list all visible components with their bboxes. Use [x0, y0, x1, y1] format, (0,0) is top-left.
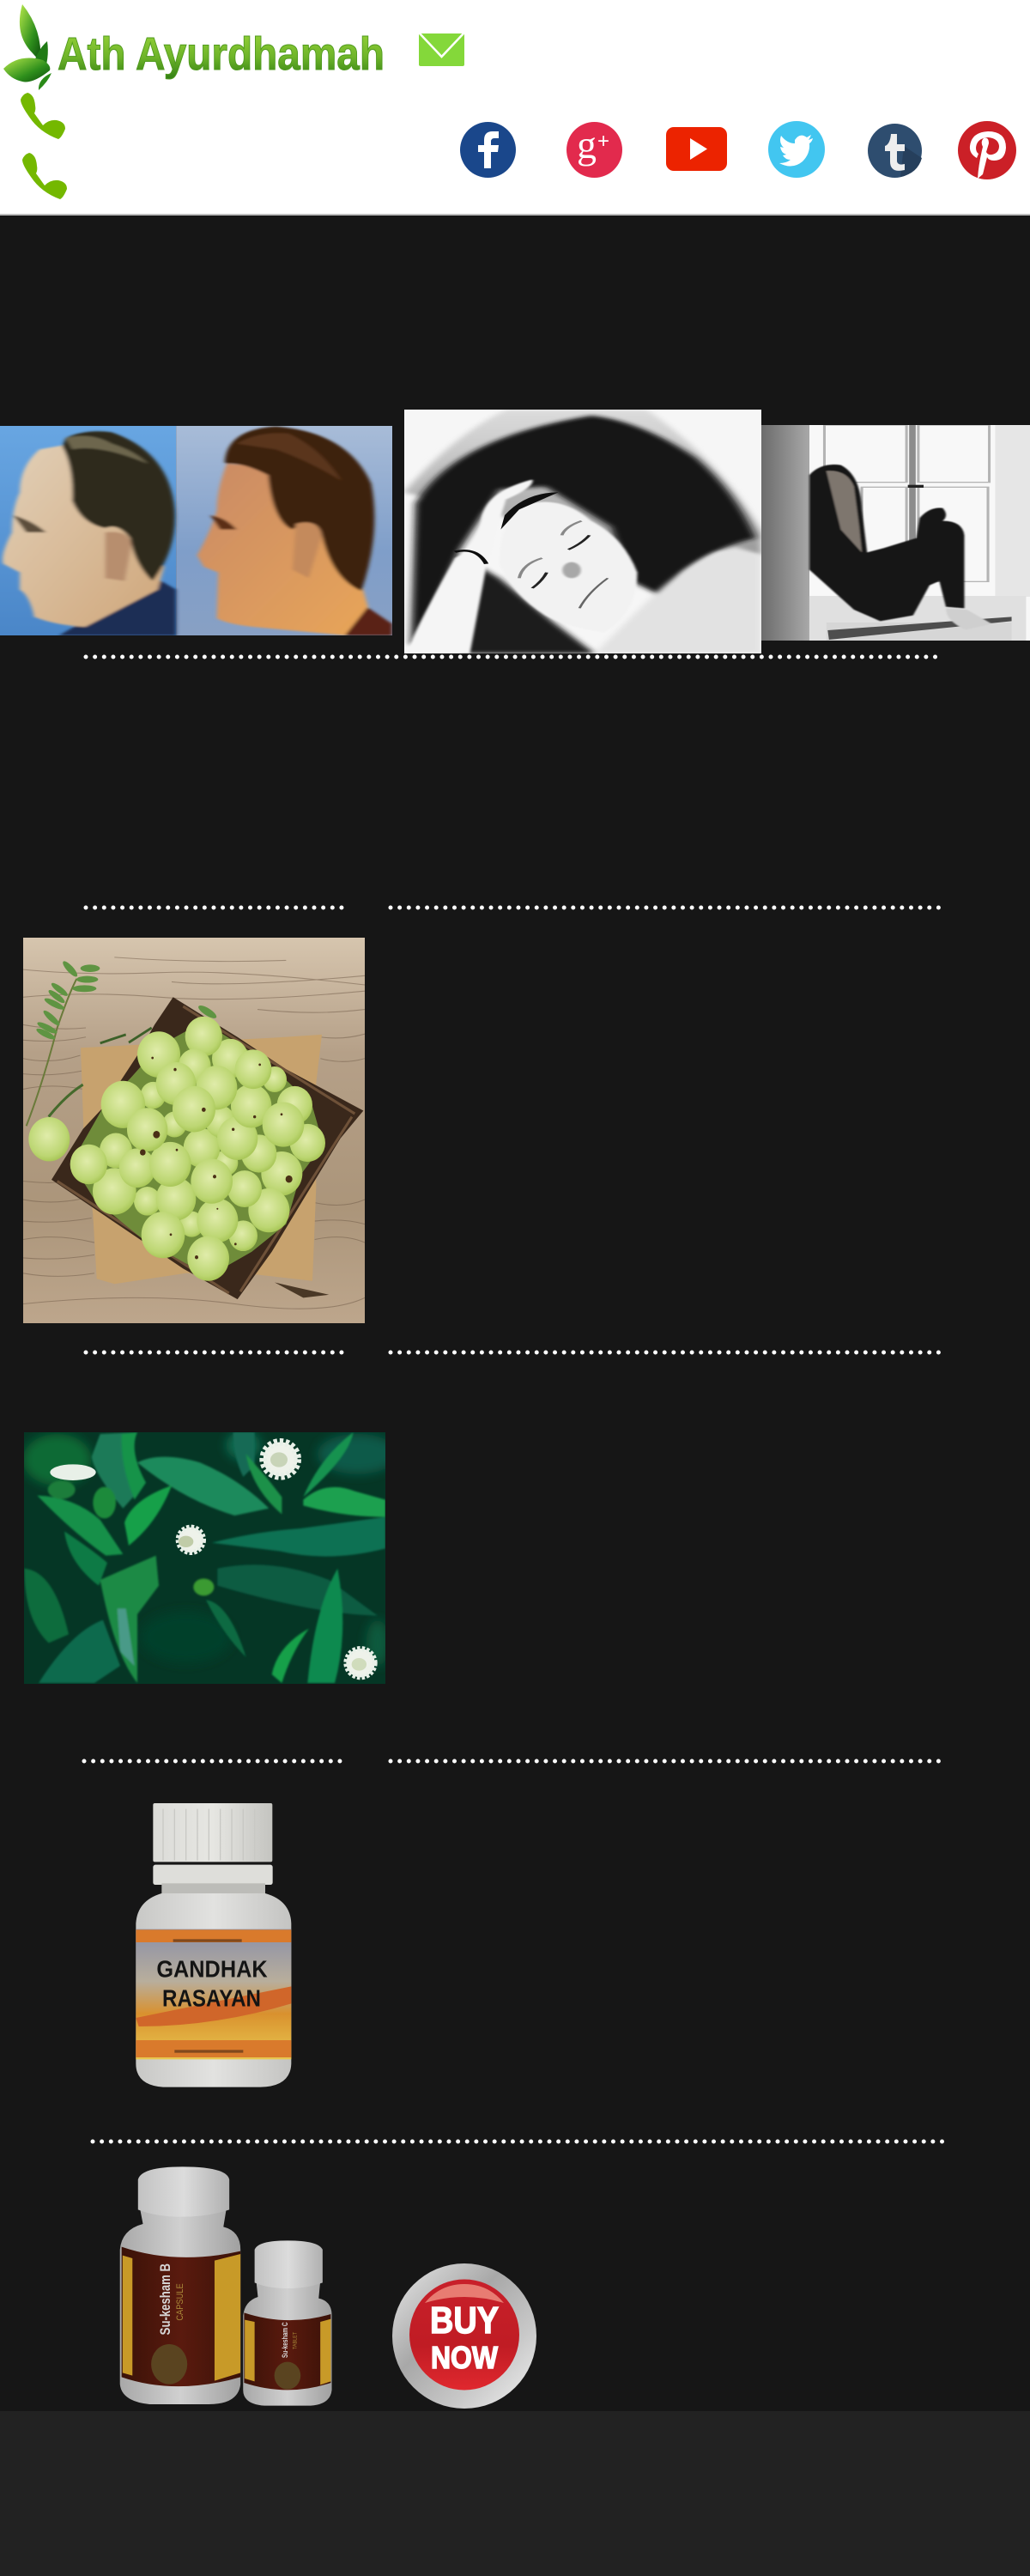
logo leaves: [3, 4, 52, 90]
sprig: [27, 959, 218, 1126]
footer band: [0, 2411, 1030, 2576]
burlap mat: [81, 1035, 322, 1284]
wood grain: [23, 957, 365, 1309]
icon: phone one: [21, 93, 65, 139]
divider: right three: [388, 1759, 941, 1764]
divider: left one: [84, 905, 343, 910]
product: gandhak rasayan bottle: [136, 1803, 292, 2087]
photo: bhringraj plant: [24, 1432, 385, 1684]
large capsule bottle: CAPSULE: [176, 2283, 185, 2321]
window frames: [824, 425, 990, 581]
photo: hair loss before and after: [0, 426, 392, 635]
before portrait: [3, 431, 176, 635]
logo text: Ath Ayurdhamah: [58, 28, 385, 80]
hand and arm: [406, 479, 532, 653]
divider: left two: [84, 1350, 343, 1355]
facial features: [519, 521, 608, 608]
girl silhouette: [809, 465, 992, 629]
after portrait: [197, 427, 392, 635]
small tablet bottle: TABLET: [293, 2332, 299, 2349]
button: buy now: BUY: [430, 2300, 499, 2342]
header bar: [0, 0, 1030, 216]
label: GANDHAK: [156, 1956, 268, 1983]
label: RASAYAN: [162, 1985, 261, 2012]
background foliage: [23, 1431, 397, 1666]
divider: full width: [91, 2140, 944, 2143]
radiator: [827, 617, 1012, 641]
divider: right one: [388, 905, 941, 910]
icon: twitter: [768, 121, 825, 178]
photo: woman in bath: [404, 410, 761, 653]
large capsule bottle: Su-kesham B: [158, 2263, 173, 2335]
white flowers: [50, 1442, 375, 1677]
divider: left three: [82, 1759, 342, 1764]
wooden tray: [52, 997, 363, 1299]
icon: pinterest: [958, 121, 1016, 179]
header bottom rule and logo block: [0, 4, 1030, 216]
photo: woman at window: [761, 425, 1030, 641]
leaves: [24, 1432, 385, 1683]
fruit shadow base: [71, 1022, 324, 1276]
icon: google plus: [566, 122, 622, 178]
icon: google plus: +: [597, 130, 609, 153]
dark hair mass: [411, 416, 755, 644]
button: buy now: [392, 2263, 536, 2409]
icon: google plus: g: [577, 123, 597, 167]
face: [500, 501, 637, 633]
cap: [153, 1803, 273, 1898]
divider: intro: [84, 654, 937, 659]
body: [136, 1893, 291, 2087]
icon: mail: [419, 33, 464, 66]
icon: facebook: [460, 122, 516, 178]
small tablet bottle: Su-kesham C: [280, 2322, 289, 2358]
photo: amla fruit on tray: [23, 938, 365, 1323]
amla fruits: [28, 1017, 325, 1281]
button: buy now: NOW: [431, 2340, 498, 2375]
large capsule bottle: [120, 2166, 240, 2404]
divider: right two: [388, 1350, 941, 1355]
icon: phone two: [22, 153, 67, 199]
product: su-kesham bottles: [120, 2166, 332, 2406]
small tablet bottle: [243, 2240, 332, 2406]
icon: tumblr: [868, 124, 922, 178]
icon: youtube: [666, 127, 727, 171]
label: [136, 1929, 291, 2059]
